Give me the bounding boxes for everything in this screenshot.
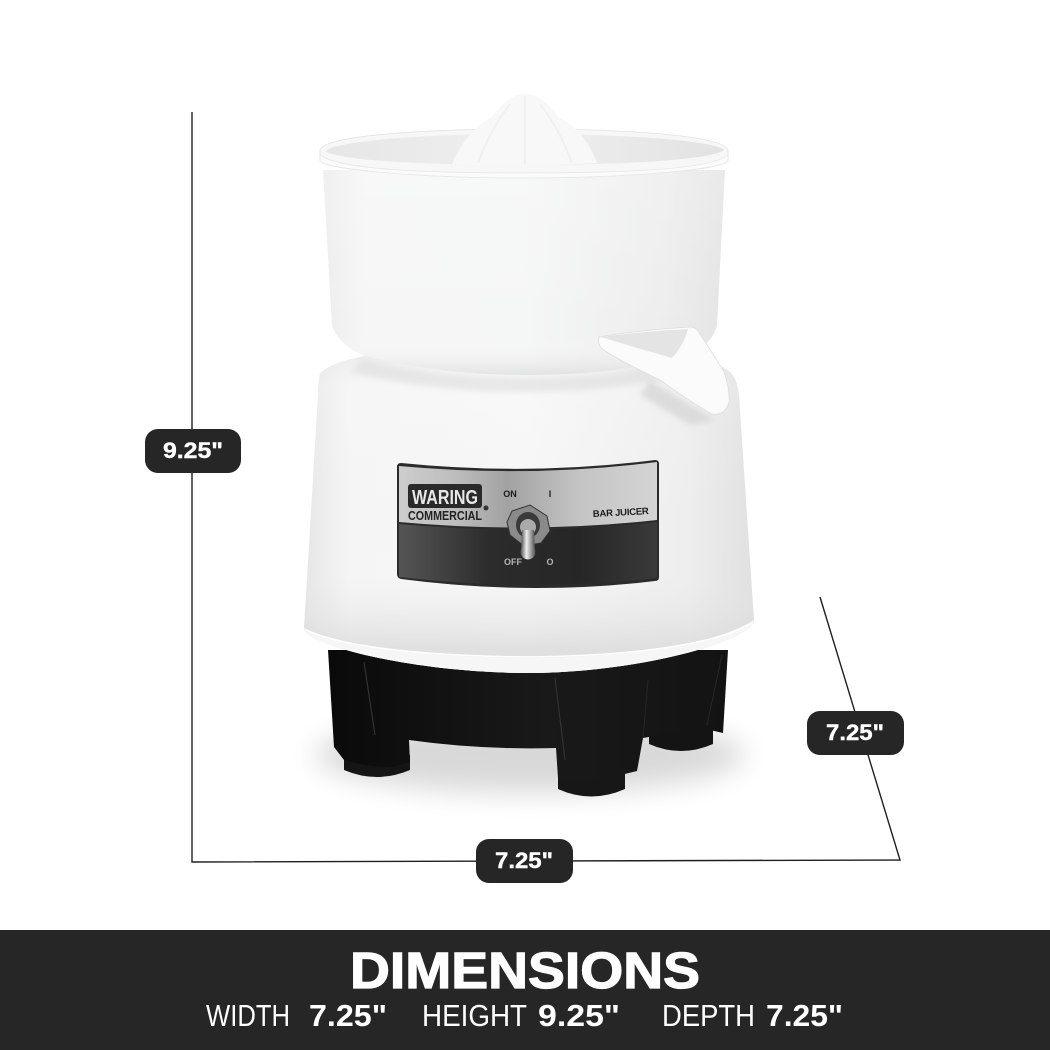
switch labels: O (546, 557, 554, 567)
banner measurements: 9.25" (538, 998, 620, 1033)
banner measurements: DEPTH (662, 998, 755, 1033)
brand logo: WARING (412, 487, 478, 509)
white motor housing (304, 352, 754, 673)
label: width (476, 839, 573, 883)
banner measurements: 7.25" (766, 998, 843, 1033)
housing flange (304, 620, 754, 673)
brand logo: COMMERCIAL (408, 508, 482, 523)
switch labels: ON (503, 489, 517, 499)
control plate (397, 460, 659, 588)
pour spout (598, 327, 729, 414)
toggle switch (507, 505, 550, 560)
dimension lines (192, 112, 900, 862)
label: height: 9.25" (163, 438, 223, 463)
banner measurements: 7.25" (309, 998, 387, 1033)
right foot (649, 725, 713, 751)
shadow under cup (350, 358, 700, 392)
left foot (344, 755, 410, 777)
banner measurements (206, 998, 843, 1033)
floor shadow (315, 717, 745, 793)
switch labels: I (549, 489, 551, 499)
label: height (145, 429, 241, 473)
brand logo (408, 484, 488, 523)
dimensions banner (0, 930, 1050, 1050)
switch labels: BAR JUICER (593, 506, 649, 520)
black base with feet (328, 650, 728, 796)
label: depth: 7.25" (826, 720, 884, 745)
juicer product (304, 94, 754, 796)
switch labels (503, 489, 649, 567)
label: width: 7.25" (495, 848, 553, 873)
banner heading: DIMENSIONS (350, 942, 700, 999)
label: depth (807, 711, 904, 755)
front foot (558, 770, 625, 796)
banner measurements: WIDTH (206, 998, 290, 1033)
juice cup (320, 94, 728, 375)
reamer cone (452, 94, 597, 165)
switch labels: OFF (504, 557, 522, 567)
banner measurements: HEIGHT (422, 998, 527, 1033)
shadow under spout (640, 380, 715, 425)
